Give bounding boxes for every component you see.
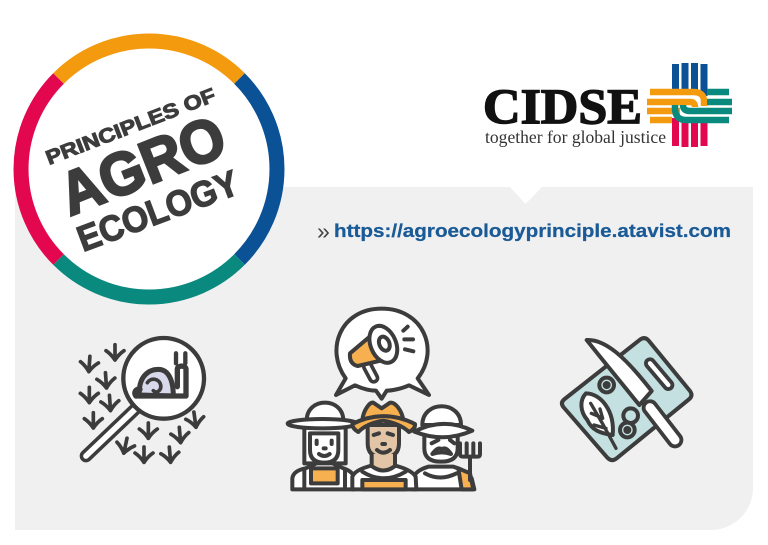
icon: farmers with megaphone [288,309,480,489]
farmer: center [352,403,416,489]
speech bubble [336,309,429,399]
ring segment: blue [240,78,277,260]
farmer: right [413,406,480,489]
heading: agro: AGRO [50,103,235,228]
ring segment: red [21,78,58,260]
panel: grey background [15,187,753,530]
icon: magnifier over snail and sprouts [80,338,205,463]
heading: principles of: PRINCIPLES OF [43,85,219,170]
link: website url: » [317,218,330,244]
cutting board [562,338,691,460]
ring segment: orange [58,41,240,78]
ring segment: teal [58,260,240,297]
magnifier lens [123,338,204,419]
sprouts [80,345,205,463]
olive slices [599,378,638,437]
logo tagline: together for global justice [485,127,666,147]
board handle slot [650,363,668,385]
logo wordmark: CIDSE [483,78,642,134]
heading: ecology: ECOLOGY [71,162,244,259]
link: website url [317,218,731,244]
knife [587,340,675,440]
logo cross [647,63,732,147]
megaphone [350,322,413,378]
leaf [581,393,616,448]
link: website url: https://agroecologyprinciple.atavist.com [334,220,731,241]
snail [135,353,186,396]
magnifier handle [86,409,135,456]
badge: principles of agroecology [21,41,277,297]
logo: CIDSE [483,63,732,147]
icon: knife on cutting board [562,338,691,460]
farmer: left [288,403,357,489]
